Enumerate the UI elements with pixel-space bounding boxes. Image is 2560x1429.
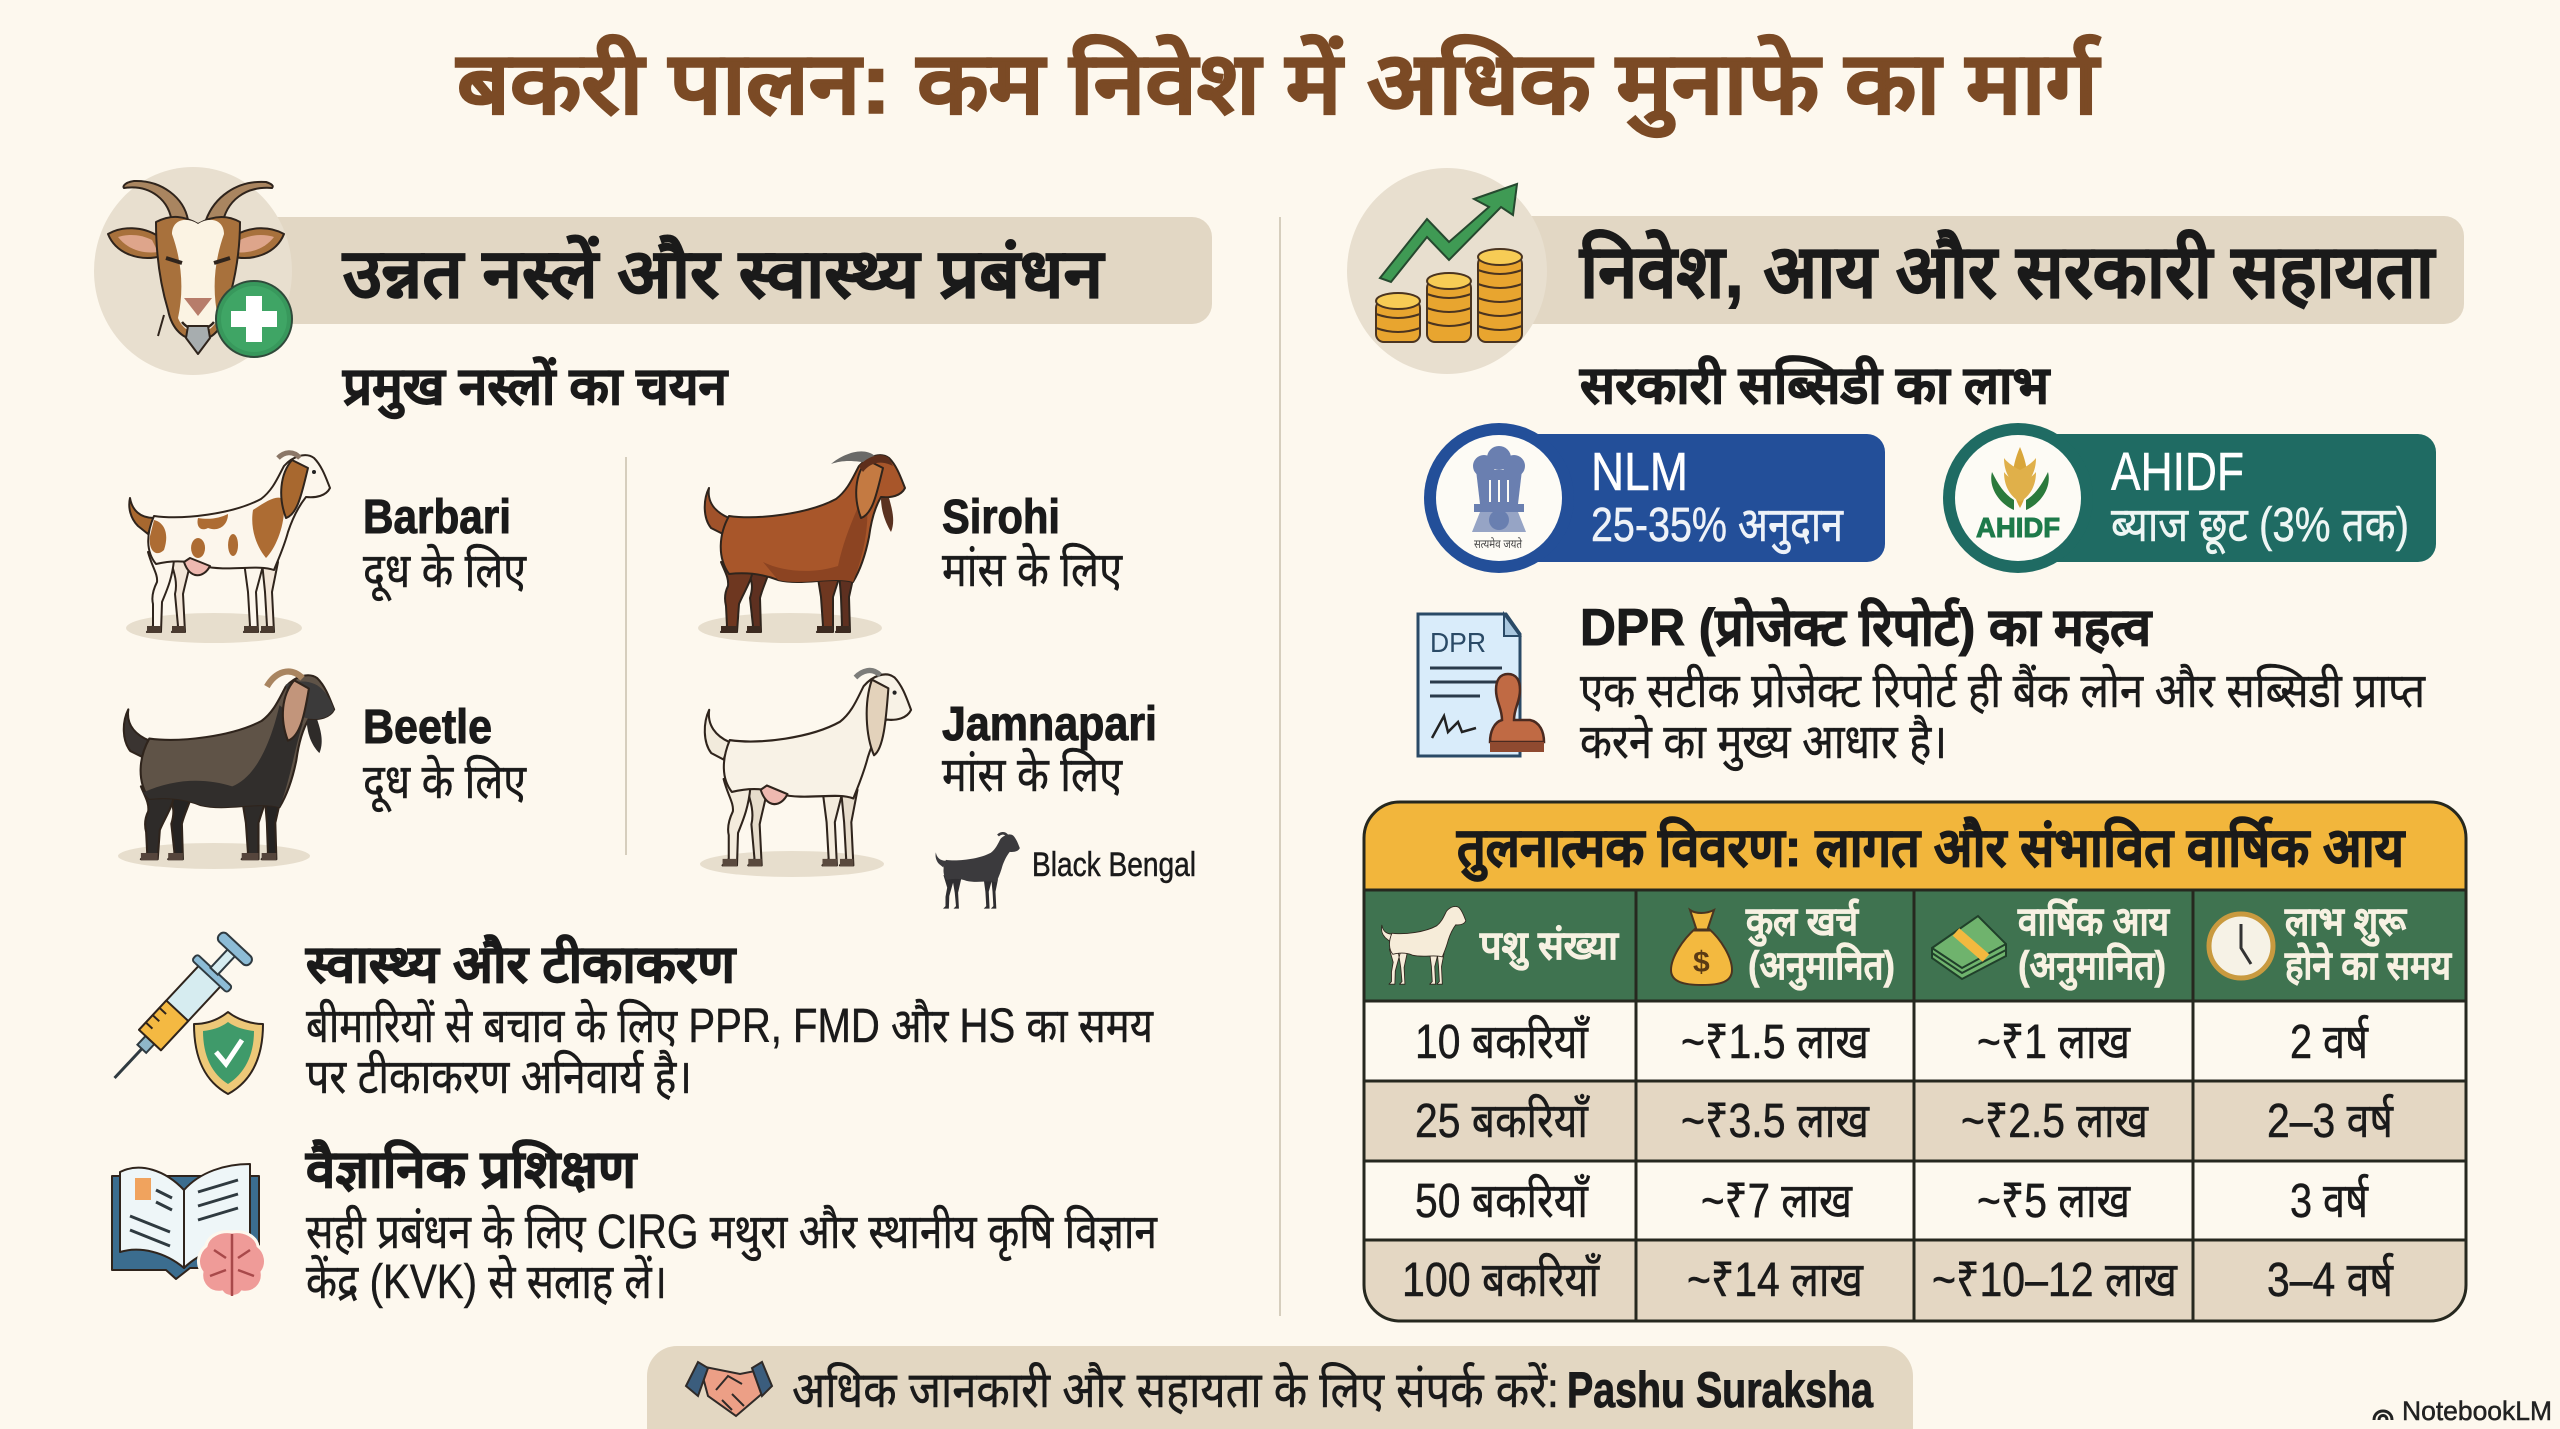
badge: NLM: 25-35% अनुदान [1591, 499, 1844, 554]
table: cost and annual income comparison [1364, 802, 2466, 1321]
footer contact bar: अधिक जानकारी और सहायता के लिए संपर्क करें: [792, 1362, 1559, 1418]
icon: coins and arrow [1376, 184, 1522, 342]
table header row: (अनुमानित) [2018, 942, 2166, 991]
badge: AHIDF: ब्याज छूट (3% तक) [2111, 499, 2409, 555]
table row: 100 goats: ~₹10–12 लाख [1932, 1254, 2178, 1307]
right section header: निवेश, आय और सरकारी सहायता [1578, 229, 2437, 313]
left section header: उन्नत नस्लें और स्वास्थ्य प्रबंधन [341, 235, 1105, 312]
icon: national emblem: सत्यमेव जयते [1474, 537, 1523, 551]
block: training [112, 1139, 1158, 1309]
subheading: breeds: प्रमुख नस्लों का चयन [342, 356, 729, 419]
breed: Black Bengal [936, 833, 1196, 909]
badge: NLM: NLM [1591, 442, 1688, 502]
block: DPR: एक सटीक प्रोजेक्ट रिपोर्ट ही बैंक लोन और सब्सिडी प्राप्त [1580, 663, 2426, 718]
icon: wheat and hands: AHIDF [1976, 512, 2060, 543]
table row: 50 goats: ~₹7 लाख [1701, 1175, 1853, 1228]
table header row: (अनुमानित) [1748, 942, 1895, 991]
icon: clock [2209, 914, 2273, 978]
icon: DPR document and stamp [1418, 614, 1544, 756]
table row: 10 goats: 10 बकरियाँ [1415, 1014, 1591, 1069]
table row: 100 goats: 100 बकरियाँ [1402, 1252, 1602, 1307]
icon: syringe and shield [97, 929, 263, 1094]
title: बकरी पालन: कम निवेश में अधिक मुनाफे का मार्ग [455, 34, 2101, 138]
table row: 100 goats: 3–4 वर्ष [2267, 1252, 2394, 1307]
table header row: पशु संख्या [1479, 924, 1620, 971]
block: training: केंद्र (KVK) से सलाह लें। [306, 1254, 667, 1309]
breed: Beetle [118, 672, 527, 869]
icon: goat head with plus [108, 181, 292, 357]
icon: goat [1382, 906, 1466, 984]
block: DPR: करने का मुख्य आधार है। [1580, 714, 1947, 771]
panel: breeds and health [94, 167, 1212, 1309]
subheading: subsidy: सरकारी सब्सिडी का लाभ [1579, 355, 2051, 415]
breed: Sirohi: मांस के लिए [942, 542, 1123, 597]
table row: 100 goats: ~₹14 लाख [1687, 1254, 1864, 1307]
table row: 25 goats: ~₹3.5 लाख [1681, 1095, 1870, 1148]
block: training: वैज्ञानिक प्रशिक्षण [305, 1139, 638, 1199]
icon: money bag: $ [1693, 946, 1710, 979]
block: training: सही प्रबंधन के लिए CIRG मथुरा और स्थानीय कृषि विज्ञान [306, 1204, 1158, 1261]
table row: 10 goats: ~₹1 लाख [1977, 1016, 2131, 1069]
block: vaccination: स्वास्थ्य और टीकाकरण [305, 934, 737, 994]
table header row [1382, 898, 2453, 991]
icon: money bag [1671, 910, 1732, 985]
left section header [94, 167, 1212, 375]
notebooklm watermark: NotebookLM [2402, 1396, 2552, 1426]
table row: 25 goats [1415, 1093, 2394, 1148]
breed: Barbari [126, 453, 527, 643]
table row: 25 goats: 25 बकरियाँ [1415, 1093, 1591, 1148]
table header row: लाभ शुरू [2284, 900, 2408, 947]
table row: 25 goats: 2–3 वर्ष [2267, 1093, 2394, 1148]
table header row: कुल खर्च [1745, 898, 1860, 947]
breed: Jamnapari: मांस के लिए [942, 747, 1123, 802]
footer contact bar [647, 1346, 1913, 1429]
breed: Jamnapari: Jamnapari [942, 698, 1157, 751]
icon: book and brain [112, 1164, 265, 1296]
breed: Beetle: Beetle [363, 701, 492, 754]
breed: Jamnapari [700, 670, 1157, 877]
badge: NLM [1424, 423, 1885, 573]
table row: 10 goats: ~₹1.5 लाख [1681, 1016, 1870, 1069]
breed: Sirohi: Sirohi [942, 491, 1060, 544]
breed: Black Bengal: Black Bengal [1032, 846, 1196, 884]
table row: 100 goats [1402, 1252, 2394, 1307]
block: vaccination [97, 929, 1154, 1104]
panel: investment and government support [1347, 168, 2466, 1321]
breed: Sirohi [698, 451, 1123, 643]
breed: Barbari: दूध के लिए [363, 543, 527, 602]
block: vaccination: बीमारियों से बचाव के लिए PPR, FMD और HS का समय [306, 998, 1154, 1053]
table row: 50 goats: 3 वर्ष [2290, 1173, 2369, 1228]
breed: Barbari: Barbari [363, 491, 511, 544]
table row: 25 goats: ~₹2.5 लाख [1961, 1095, 2149, 1148]
icon: national emblem [1472, 446, 1526, 551]
icon: DPR document and stamp: DPR [1430, 627, 1486, 658]
table row: 10 goats [1415, 1014, 2369, 1069]
block: DPR: DPR (प्रोजेक्ट रिपोर्ट) का महत्व [1580, 597, 2153, 657]
table row: 50 goats [1415, 1173, 2369, 1228]
icon: handshake [686, 1362, 772, 1416]
table header row: वार्षिक आय [2017, 898, 2171, 944]
block: vaccination: पर टीकाकरण अनिवार्य है। [306, 1049, 692, 1104]
breed: Beetle: दूध के लिए [363, 754, 527, 813]
badge: AHIDF: AHIDF [2111, 442, 2244, 502]
table header row: होने का समय [2284, 942, 2453, 988]
block: DPR [1418, 597, 2426, 771]
table row: 50 goats: 50 बकरियाँ [1415, 1173, 1591, 1228]
icon: cash stack [1932, 916, 2006, 979]
table row: 10 goats: 2 वर्ष [2290, 1014, 2369, 1069]
icon: wheat and hands [1976, 447, 2060, 543]
table row: 50 goats: ~₹5 लाख [1977, 1175, 2131, 1228]
table title: तुलनात्मक विवरण: लागत और संभावित वार्षिक आय [1456, 816, 2406, 882]
right section header [1347, 168, 2464, 374]
badge: AHIDF [1943, 423, 2436, 573]
footer contact bar: Pashu Suraksha [1567, 1362, 1874, 1418]
